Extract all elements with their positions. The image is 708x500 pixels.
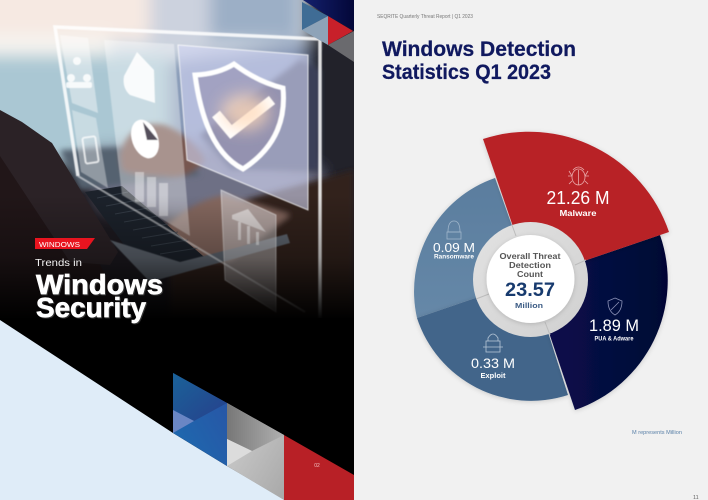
label: PUA and adware: PUA & Adware [594,336,634,342]
tag: WINDOWS [35,238,95,249]
hologram frame [55,27,320,320]
icon: server stacks [135,172,168,216]
hologram panels [60,35,308,312]
heading: Trends in: Trends in [35,257,82,269]
footnote: M represents Million [632,430,682,436]
label: ransomware: Ransomware [434,254,475,260]
segment: ransomware [414,178,531,318]
heading: Windows Security: Windows [36,269,163,300]
photo: table and wood [58,60,354,290]
heading: Windows Security: Security [36,292,146,323]
tag: WINDOWS: WINDOWS [39,240,80,249]
segment: PUA and adware [531,235,668,410]
label: ransomware: 0.09 M [433,240,475,255]
icon: bug [568,167,589,185]
label: malware [546,188,610,218]
center label: overall count: Overall Threat [500,251,561,261]
label: exploit [471,355,515,380]
icon: bank building [232,209,266,245]
photo: desk [0,156,18,184]
title: Statistics Q1 2023 [382,61,551,84]
label: PUA and adware [589,316,639,342]
icon: pie chart [130,119,160,159]
geometric shapes: top-right corner [302,0,354,62]
geometric shape: blue [173,373,227,466]
donut chart [414,132,669,410]
label: ransomware [433,240,475,260]
photo: laptop screen [0,110,118,265]
icon: wallet [124,52,155,103]
report header line: SEQRITE Quarterly Threat Report | Q1 2023 [377,14,473,20]
black lower area [0,318,354,500]
center white circle [486,235,574,323]
fade of photo to black [0,195,354,320]
photo: laptop and hands background [0,0,354,316]
label: PUA and adware: 1.89 M [589,316,639,335]
icon: people network [66,57,92,88]
icon: lock [483,334,503,352]
icon: document and pen [82,136,99,164]
label: exploit: Exploit [480,373,506,380]
geometric shape: gray [227,403,284,500]
photo: hand [120,124,205,177]
photo: laptop base [110,234,290,282]
icon: shield [608,298,622,315]
center label: overall count: 23.57 [505,280,555,301]
label: malware: Malware [560,209,597,218]
center label: overall count: Detection [509,260,551,270]
center label: overall count: Count [517,269,543,279]
segment: exploit [417,279,568,401]
icon: hacker [447,221,461,239]
heading: Windows Security [36,269,163,323]
center label: overall count [500,251,561,310]
light blue diagonal corner [0,320,285,500]
label: malware: 21.26 M [546,188,610,208]
page background: right page [354,0,708,500]
center label: overall count: Million [515,301,543,310]
segment: malware [483,132,669,279]
inner gray ring [473,222,588,337]
geometric shape: red [284,435,354,500]
page number left: 02 [314,463,320,469]
title [382,38,576,84]
photo: keyboard [85,186,204,262]
title: Windows Detection [382,38,576,61]
label: exploit: 0.33 M [471,355,515,371]
left page: cover [0,0,380,500]
icon: shield with check [195,64,284,169]
